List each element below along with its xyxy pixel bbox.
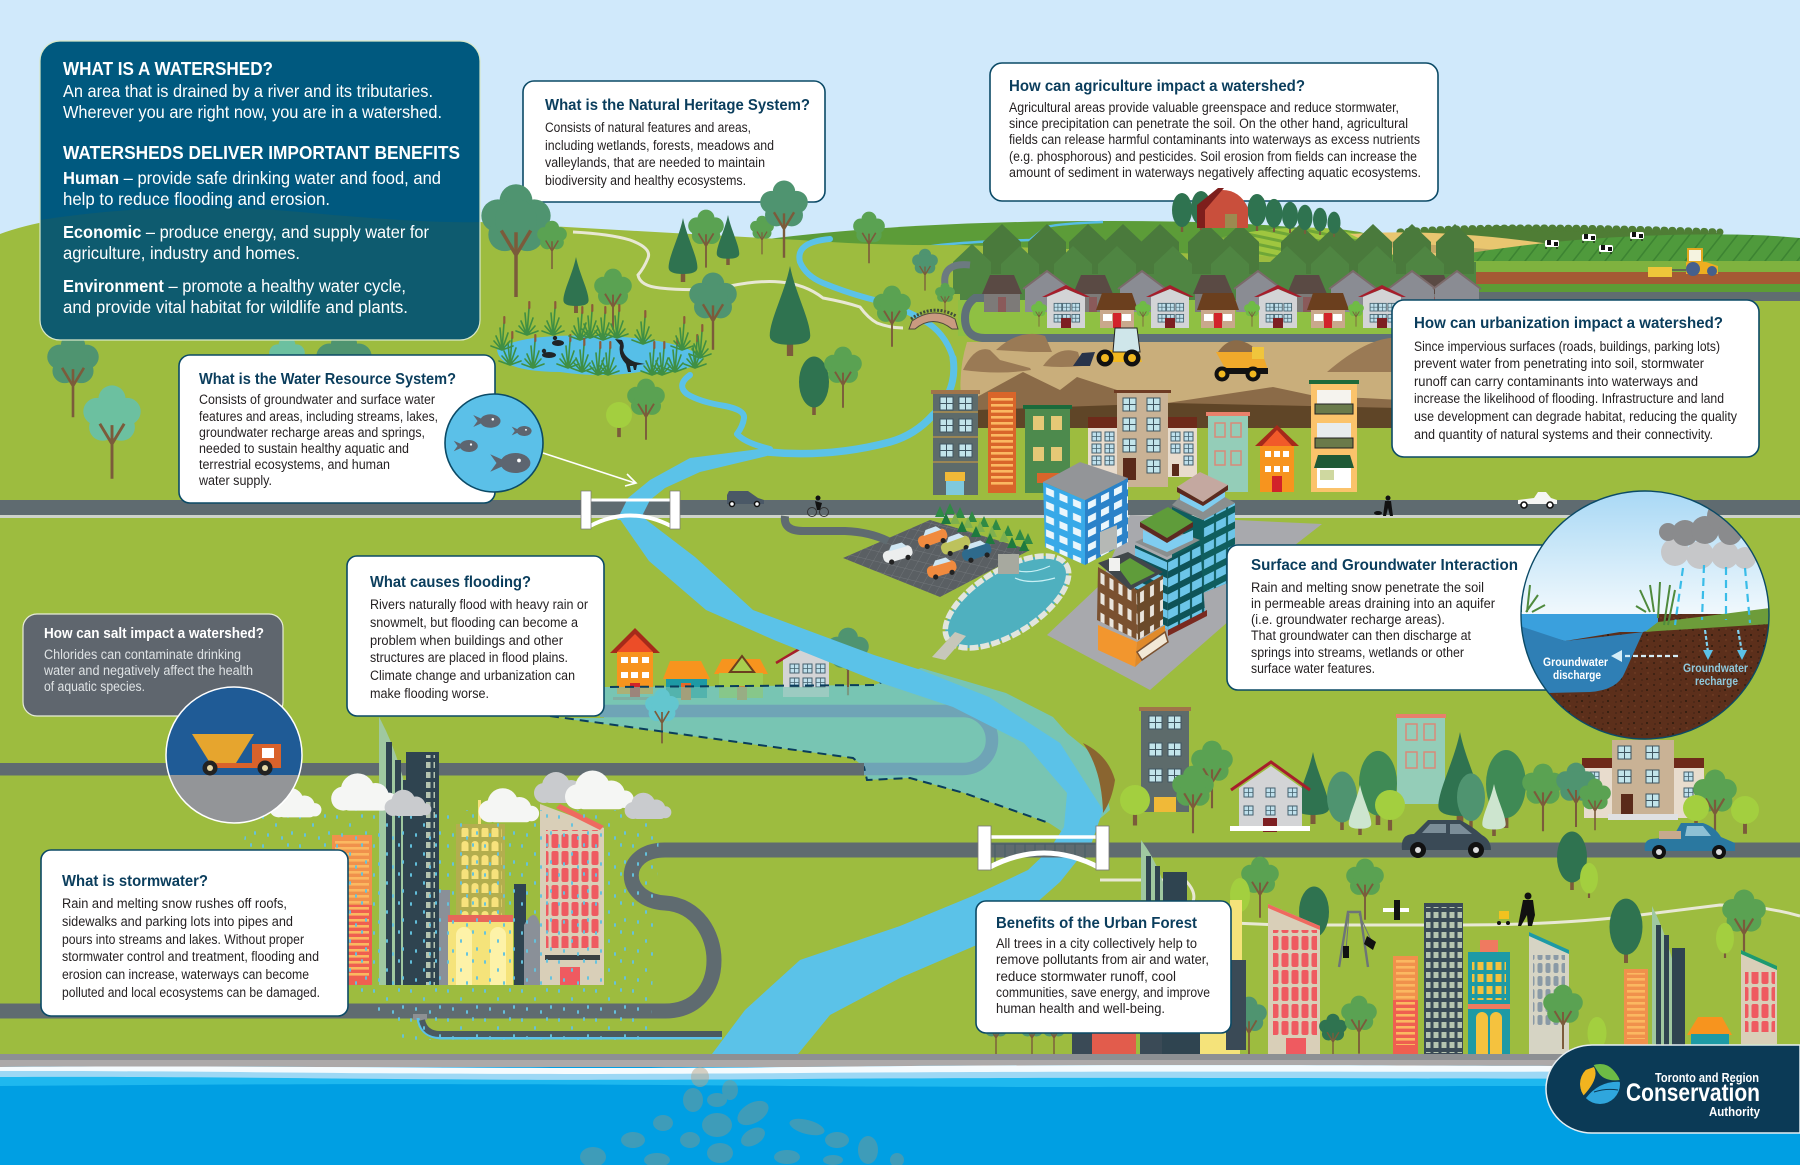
icon: tractor: [1648, 249, 1718, 277]
grey building: [1139, 707, 1191, 812]
access road: [785, 516, 888, 541]
groundwater diagram circle: [1520, 490, 1770, 744]
body text: Chlorides can contaminate drinking: [44, 647, 241, 662]
body text: runoff can carry contaminants into waterways and: [1414, 374, 1698, 389]
logo text: Toronto and Region: [1655, 1070, 1759, 1085]
body text: All trees in a city collectively help to: [996, 936, 1197, 951]
icon: heron: [615, 339, 645, 372]
sediment plume: [580, 1067, 904, 1165]
main river: [617, 515, 1103, 1054]
far right skyline: [1652, 906, 1685, 1045]
body text: springs into streams, wetlands or other: [1251, 645, 1464, 660]
body text: water supply.: [198, 473, 272, 488]
building: beige block: [1088, 390, 1197, 487]
body text: That groundwater can then discharge at: [1251, 628, 1471, 643]
dashed flood line: [550, 676, 1049, 823]
body text: polluted and local ecosystems can be damaged.: [62, 985, 320, 1000]
body text: and quantity of natural systems and their connectivity.: [1414, 427, 1713, 442]
body text: pours into streams and lakes. Without proper: [62, 932, 304, 947]
town houses: [982, 271, 1481, 328]
body text: water and negatively affect the health: [43, 663, 253, 678]
body text: prevent water from penetrating into soil, stormwater: [1414, 356, 1705, 371]
orange tower: [1393, 956, 1418, 1054]
grove of shrubs: [935, 503, 1033, 551]
flood water over houses, road and dashed flood line: [550, 676, 1049, 823]
panel: what causes flooding: [347, 556, 604, 716]
body text: [545, 120, 774, 188]
arrow: to river: [543, 453, 636, 486]
benefits text: Human – provide safe drinking water and food, and: [63, 168, 441, 188]
park path: [1040, 880, 1800, 925]
swing set: [1339, 912, 1371, 967]
benefits text: agriculture, industry and homes.: [63, 243, 300, 263]
brown rooftop-garden building: [1097, 552, 1168, 667]
body text: erosion can increase, waterways can become: [62, 967, 309, 982]
small tower: [1141, 840, 1187, 902]
heading: How can urbanization impact a watershed?: [1414, 315, 1723, 332]
panel: salt impact: [23, 614, 283, 716]
heading: What causes flooding?: [370, 574, 531, 591]
body text: [62, 896, 320, 1000]
front teal tower: [1135, 507, 1207, 636]
heading: Surface and Groundwater Interaction: [1251, 557, 1518, 574]
panel: water resource system: [179, 355, 495, 503]
discharge label: discharge: [1553, 670, 1601, 682]
bridge lower: [978, 826, 1109, 870]
icon: grey house: [776, 645, 832, 697]
body text: Agricultural areas provide valuable greenspace and reduce stormwater,: [1009, 100, 1399, 115]
body text: [1414, 339, 1737, 442]
bridge upper: [581, 491, 680, 529]
silhouetted houses behind town: [953, 224, 1476, 302]
panel: urban forest: [976, 901, 1231, 1033]
person on bench: [1383, 900, 1409, 920]
body text: make flooding worse.: [370, 686, 489, 701]
heading: What is stormwater?: [62, 873, 208, 890]
farm fields and bands: [1440, 234, 1800, 301]
panel: agriculture impact: [990, 63, 1438, 201]
benefits text: and provide vital habitat for wildlife and plants.: [63, 297, 408, 317]
rain: [240, 810, 660, 1040]
logo mark: [1580, 1064, 1620, 1104]
body text: surface water features.: [1251, 661, 1375, 676]
benefits text: [63, 168, 441, 317]
body text: Rain and melting snow penetrate the soil: [1251, 580, 1484, 595]
icon: green house: [714, 656, 768, 700]
body text: amount of sediment in waterways negatively affecting aquatic ecosystems.: [1009, 165, 1421, 180]
plaza: [1047, 515, 1322, 690]
intro text: An area that is drained by a river and its tributaries.: [63, 81, 433, 101]
body text: biodiversity and healthy ecosystems.: [545, 173, 746, 188]
panel: natural heritage system: [523, 81, 825, 202]
reeds: [1521, 582, 1675, 625]
building: grey: [931, 390, 980, 495]
logo text: Authority: [1709, 1104, 1761, 1119]
submerged tree: [645, 689, 679, 743]
teal building: [1396, 714, 1446, 804]
building: orange: [988, 392, 1016, 493]
body text: Consists of groundwater and surface water: [199, 392, 435, 407]
body text: remove pollutants from air and water,: [996, 952, 1209, 967]
body text: including wetlands, forests, meadows and: [545, 138, 774, 153]
body text: Since impervious surfaces (roads, buildings, parking lots): [1414, 339, 1720, 354]
heading: How can salt impact a watershed?: [44, 626, 264, 642]
neighbourhood east of river: [1120, 707, 1759, 859]
road S-curve: [0, 850, 1800, 1011]
discharge label: [1543, 657, 1608, 682]
grey tower: [1529, 932, 1569, 1054]
beige tower with red windows: [1268, 904, 1320, 1054]
pink-window building: [540, 804, 604, 985]
body text: [370, 597, 588, 701]
body text: groundwater recharge areas and springs,: [199, 425, 425, 440]
isometric development: [785, 462, 1322, 690]
benefits heading: WATERSHEDS DELIVER IMPORTANT BENEFITS: [63, 142, 460, 163]
walker with stroller: [1497, 892, 1535, 926]
flood plain houses: [610, 628, 869, 700]
road mid-left: [0, 763, 864, 776]
blue office building: [1043, 462, 1128, 565]
van: [1402, 820, 1491, 858]
icon: fish circle: [445, 394, 543, 492]
logo: Toronto and Region Conservation Authority: [1546, 1045, 1800, 1133]
river banks: [1083, 743, 1115, 813]
upland footpath: [573, 232, 903, 328]
body text: [1009, 100, 1421, 180]
back teal tower: [1172, 472, 1235, 593]
building: green: [1023, 405, 1072, 493]
body text: of aquatic species.: [44, 679, 145, 694]
parked cars: [881, 524, 994, 581]
body text: Rivers naturally flood with heavy rain or: [370, 597, 588, 612]
main road: [0, 500, 1800, 518]
body text: snowmelt, but flooding can become a: [370, 615, 579, 630]
heading: WHAT IS A WATERSHED?: [63, 58, 273, 79]
flooded road: [600, 711, 992, 769]
yellow building: [448, 800, 513, 985]
body text: Consists of natural features and areas,: [545, 120, 751, 135]
body text: [43, 647, 253, 694]
rain cloud: [1659, 510, 1756, 569]
white house: [1230, 762, 1310, 832]
body text: sidewalks and parking lots into pipes and: [62, 914, 293, 929]
stormwater pond: [931, 538, 1083, 666]
heading: Benefits of the Urban Forest: [996, 915, 1198, 932]
stormwater pipe outlet: [413, 1014, 722, 1038]
panel: what is a watershed: [40, 41, 480, 340]
body text: [1251, 580, 1496, 676]
row of upper buildings: [931, 380, 1359, 495]
icon: orange house: [610, 628, 660, 700]
wetland pond with reeds, ducks and heron: [491, 301, 711, 375]
street trees: [1231, 985, 1606, 1059]
dark grid tower: [1424, 903, 1463, 1054]
body text: in permeable areas draining into an aquifer: [1251, 596, 1496, 611]
recharge arrows: [1705, 630, 1742, 652]
benefits text: help to reduce flooding and erosion.: [63, 189, 330, 209]
teal ornate tower: [1468, 940, 1510, 1054]
recharge label: recharge: [1695, 676, 1738, 688]
body text: Climate change and urbanization can: [370, 668, 575, 683]
icon: salt truck circle: [165, 686, 303, 824]
body text: (i.e. groundwater recharge areas).: [1251, 612, 1445, 627]
icon: teal cottage: [663, 661, 710, 700]
recharge label: [1683, 663, 1748, 688]
body text: human health and well-being.: [996, 1001, 1165, 1016]
rain lines: [1675, 565, 1750, 625]
logo text: [1626, 1070, 1761, 1119]
body text: fields can release harmful contaminants into waterways as excess nutrients: [1009, 132, 1420, 147]
body text: needed to sustain healthy aquatic and: [199, 441, 409, 456]
upper river and pond branch: [617, 239, 954, 520]
parking lot: [843, 520, 1030, 597]
body text: increase the likelihood of flooding. Infrastructure and land: [1414, 391, 1724, 406]
town lawn and road: [945, 265, 1408, 338]
trees upland: [47, 181, 955, 479]
body text: terrestrial ecosystems, and human: [199, 457, 390, 472]
icon: barn and tree row: [1172, 188, 1340, 237]
blue car: [1645, 823, 1735, 859]
road traffic: car, cyclist, pedestrian, white pickup: [727, 491, 1557, 516]
flood zone fill: [560, 668, 1110, 840]
building: orange house: [1255, 425, 1299, 492]
discharge arrow: [1620, 655, 1678, 657]
urban forest scene: [982, 832, 1800, 1059]
discharge label: Groundwater: [1543, 657, 1608, 669]
body text: communities, save energy, and improve: [996, 985, 1210, 1000]
body text: problem when buildings and other: [370, 633, 564, 648]
benefits text: Economic – produce energy, and supply water for: [63, 222, 429, 242]
cows and tractor: [1545, 232, 1718, 277]
benefits text: Environment – promote a healthy water cycle,: [63, 276, 406, 296]
small footbridge: [909, 310, 958, 329]
far hills: [760, 221, 1720, 262]
lakeshore and water: [0, 1054, 1800, 1165]
body text: features and areas, including streams, lakes,: [199, 409, 438, 424]
children on swing: [1343, 936, 1376, 958]
panel: what is stormwater: [41, 850, 348, 1016]
intro text: [63, 81, 442, 122]
recharge label: Groundwater: [1683, 663, 1748, 675]
orange building: [332, 835, 372, 985]
body text: [996, 936, 1210, 1016]
intro text: Wherever you are right now, you are in a watershed.: [63, 102, 442, 122]
building: teal: [1206, 412, 1250, 492]
body text: stormwater control and treatment, flooding and: [62, 949, 319, 964]
body text: valleylands, that are needed to maintain: [545, 155, 765, 170]
body text: since precipitation can penetrate the soil. On the other hand, agricultural: [1009, 116, 1408, 131]
icon: ducks: [542, 336, 564, 358]
panel: surface and groundwater interaction: [1227, 545, 1557, 690]
icon: dump truck: [1214, 340, 1268, 382]
body text: (e.g. phosphorous) and pesticides. Soil erosion from fields can increase the: [1009, 149, 1417, 164]
heading: What is the Water Resource System?: [199, 371, 456, 388]
logo text: Conservation: [1626, 1079, 1760, 1107]
body text: structures are placed in flood plains.: [370, 650, 568, 665]
beige building: [1582, 740, 1704, 820]
body text: reduce stormwater runoff, cool: [996, 969, 1176, 984]
body text: use development can degrade habitat, reducing the quality: [1414, 409, 1737, 424]
building: balcony apartment: [1309, 380, 1359, 492]
panel: urbanization impact: [1392, 300, 1759, 457]
heading: How can agriculture impact a watershed?: [1009, 78, 1305, 95]
city bottom-left: [240, 717, 671, 1040]
thin stream on far hill: [920, 222, 1103, 248]
construction site: [960, 328, 1400, 428]
buildings under forest box: [1072, 900, 1246, 1054]
heading: What is the Natural Heritage System?: [545, 97, 810, 114]
body text: [198, 392, 438, 488]
body text: Rain and melting snow rushes off roofs,: [62, 896, 287, 911]
glass tower: [379, 717, 450, 985]
clouds: [269, 770, 671, 822]
icon: loader: [1073, 328, 1142, 366]
